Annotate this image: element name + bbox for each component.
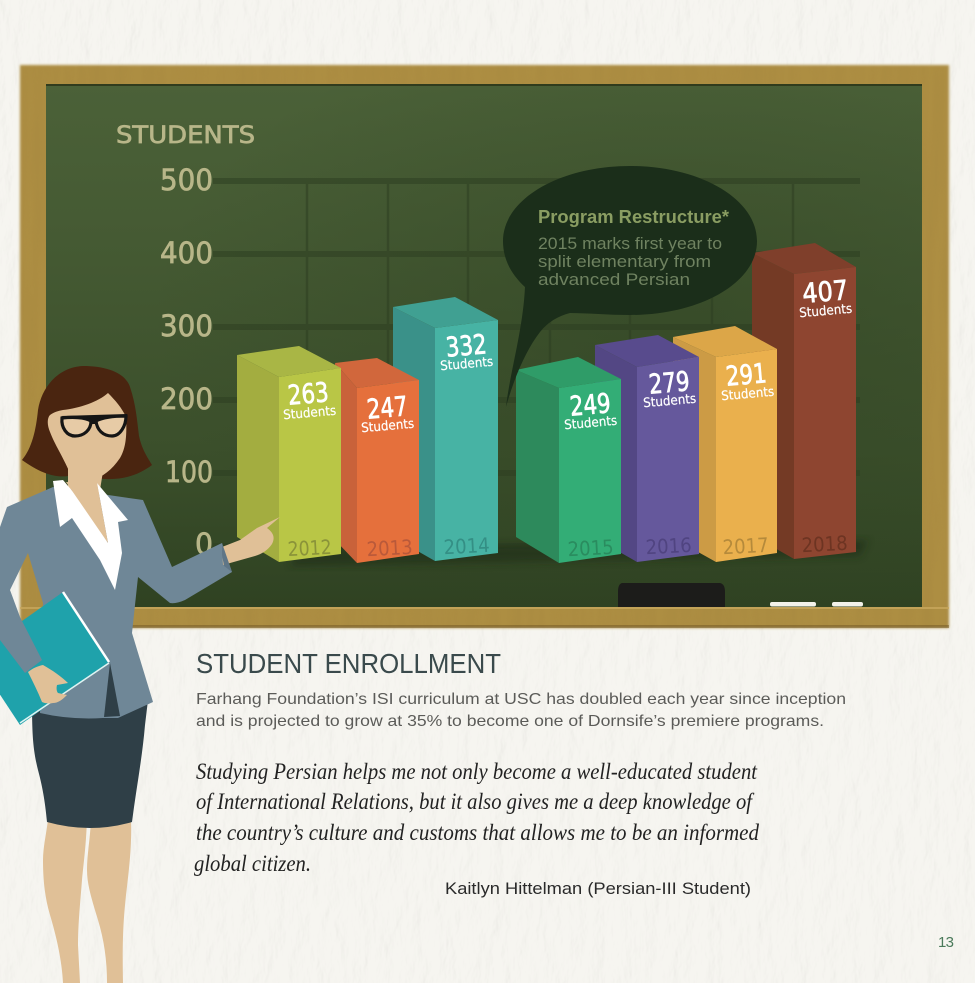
bar 2013: 247 xyxy=(365,391,409,426)
bar 2016: 279 xyxy=(647,366,691,401)
shirt and collar xyxy=(53,480,128,590)
bar 2015: Students xyxy=(564,414,618,433)
eraser xyxy=(618,583,725,607)
bar 2012: 2012 xyxy=(287,535,332,561)
bar 2014: 332 xyxy=(444,329,488,364)
student quote: of International Relations, but it also gives me a deep knowledge of xyxy=(196,789,755,814)
bar 2015: 249 xyxy=(568,388,612,423)
skirt vent xyxy=(104,663,120,717)
callout: program restructure xyxy=(503,166,757,407)
student quote: Studying Persian helps me not only become a well-educated student xyxy=(196,759,758,784)
bar 2017: 2017 xyxy=(722,533,769,559)
y axis labels: 300 xyxy=(160,309,213,343)
wooden frame xyxy=(20,65,949,628)
callout: program restructure: Program Restructure* xyxy=(538,207,729,227)
student quote: the country’s culture and customs that allows me to be an informed xyxy=(196,820,759,845)
bar 2018: 407 xyxy=(801,275,850,310)
description text xyxy=(196,691,846,730)
bar 2012: Students xyxy=(283,404,337,423)
bar 2017: 291 xyxy=(724,358,768,393)
bar 2014: Students xyxy=(440,355,494,374)
heading: STUDENT ENROLLMENT xyxy=(196,648,501,679)
bar 2017 xyxy=(673,326,777,562)
bar 2016 xyxy=(595,335,699,562)
panel: chalkboard with wooden frame xyxy=(20,65,949,628)
pointing hand xyxy=(222,517,280,565)
glasses xyxy=(61,414,127,436)
jacket torso xyxy=(28,487,232,718)
bar 2016: Students xyxy=(643,392,697,411)
bar 2018: 2018 xyxy=(801,531,848,557)
callout: program restructure: advanced Persian xyxy=(538,270,690,289)
bar 2018 xyxy=(752,243,856,559)
page number: 13 xyxy=(938,934,954,951)
hair back xyxy=(22,366,152,479)
y axis labels xyxy=(160,163,213,561)
sleeve cuff xyxy=(222,543,232,572)
bar 2017: Students xyxy=(721,385,775,404)
bar 2012 xyxy=(237,346,341,562)
neckline xyxy=(66,482,108,543)
holding hand xyxy=(28,665,68,703)
bar 2013: Students xyxy=(361,417,415,436)
bar chart xyxy=(237,243,856,563)
y axis labels: 200 xyxy=(160,382,213,416)
neck xyxy=(68,462,110,545)
y axis labels: 400 xyxy=(160,236,213,270)
description text: and is projected to grow at 35% to become one of Dornsife’s premiere programs. xyxy=(196,713,824,730)
chalk pieces xyxy=(770,602,863,606)
student quote xyxy=(194,759,759,876)
jacket left arm xyxy=(0,487,53,673)
teacher figure xyxy=(0,366,280,983)
bar 2014: 2014 xyxy=(443,533,490,559)
bar 2013: 2013 xyxy=(366,535,413,561)
bar 2016: 2016 xyxy=(645,533,692,559)
skirt xyxy=(32,700,148,828)
bar 2015: 2015 xyxy=(567,535,614,561)
bar 2014 xyxy=(393,297,498,561)
quote attribution: Kaitlyn Hittelman (Persian-III Student) xyxy=(445,879,751,898)
callout: program restructure: 2015 marks first year to xyxy=(538,234,722,253)
description text: Farhang Foundation’s ISI curriculum at USC has doubled each year since inception xyxy=(196,691,846,708)
bar 2012: 263 xyxy=(286,377,330,412)
board surface xyxy=(46,84,922,607)
y axis labels: 500 xyxy=(160,163,213,197)
face xyxy=(48,393,126,480)
bar shadows xyxy=(290,540,868,566)
y axis labels: 0 xyxy=(195,527,213,561)
callout: program restructure: split elementary from xyxy=(538,252,711,271)
bar 2013 xyxy=(335,358,419,563)
y axis labels: 100 xyxy=(165,455,213,489)
bar 2015 xyxy=(516,357,621,563)
bar 2018: Students xyxy=(799,302,853,321)
legs xyxy=(43,820,131,983)
student quote: global citizen. xyxy=(194,851,311,876)
book xyxy=(0,592,109,725)
y axis title: STUDENTS xyxy=(116,121,255,149)
